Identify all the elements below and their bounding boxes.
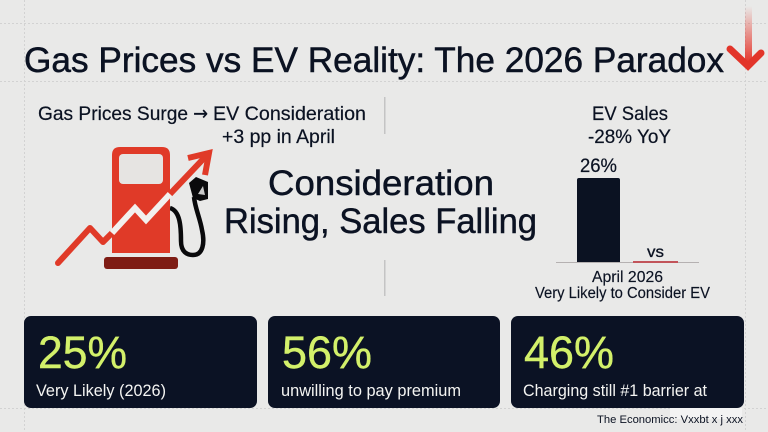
pump window	[119, 154, 163, 184]
card: very likely: Very Likely (2026)	[36, 381, 166, 400]
pump body	[112, 147, 170, 253]
card: charging barrier: 46%	[524, 327, 614, 378]
icon: fuel pump with rising arrow	[58, 147, 209, 269]
pump base	[104, 257, 178, 269]
card: unwilling to pay premium: 56%	[282, 327, 372, 378]
rising arrow	[58, 228, 113, 263]
card: charging barrier: Charging still #1 barrier at	[523, 381, 707, 400]
EV sales heading: EV Sales	[592, 104, 668, 125]
source note: The Economicc: Vxxbt x j xxx	[597, 414, 744, 426]
gas price subheading: Gas Prices Surge	[38, 103, 188, 125]
card: very likely: 25%	[38, 327, 127, 378]
pump hose	[170, 197, 203, 255]
dark bar	[577, 178, 620, 262]
chart caption: April 2026	[592, 269, 663, 286]
divider bottom	[384, 260, 386, 296]
card: very likely	[24, 316, 257, 408]
bar chart	[535, 156, 711, 302]
pump nozzle	[189, 177, 208, 201]
red bar	[633, 261, 678, 263]
gas price subheading: →	[193, 102, 208, 125]
card: unwilling to pay premium	[268, 316, 500, 408]
gas price subheading: +3 pp in April	[222, 126, 335, 148]
gas price subheading: EV Consideration	[213, 103, 366, 125]
central headline: Rising, Sales Falling	[224, 202, 537, 241]
title: Gas Prices vs EV Reality: The 2026 Paradox	[24, 41, 725, 80]
card: unwilling to pay premium: unwilling to pay premium	[281, 381, 461, 400]
divider top	[384, 97, 386, 134]
vs label: vs	[647, 244, 664, 261]
icon: red down arrow	[730, 6, 761, 66]
EV sales heading: -28% YoY	[588, 127, 671, 148]
card: charging barrier	[511, 316, 744, 408]
central headline: Consideration	[268, 164, 494, 203]
chart caption: Very Likely to Consider EV	[535, 285, 711, 302]
source note	[597, 408, 744, 426]
bar value label: 26%	[580, 156, 617, 177]
